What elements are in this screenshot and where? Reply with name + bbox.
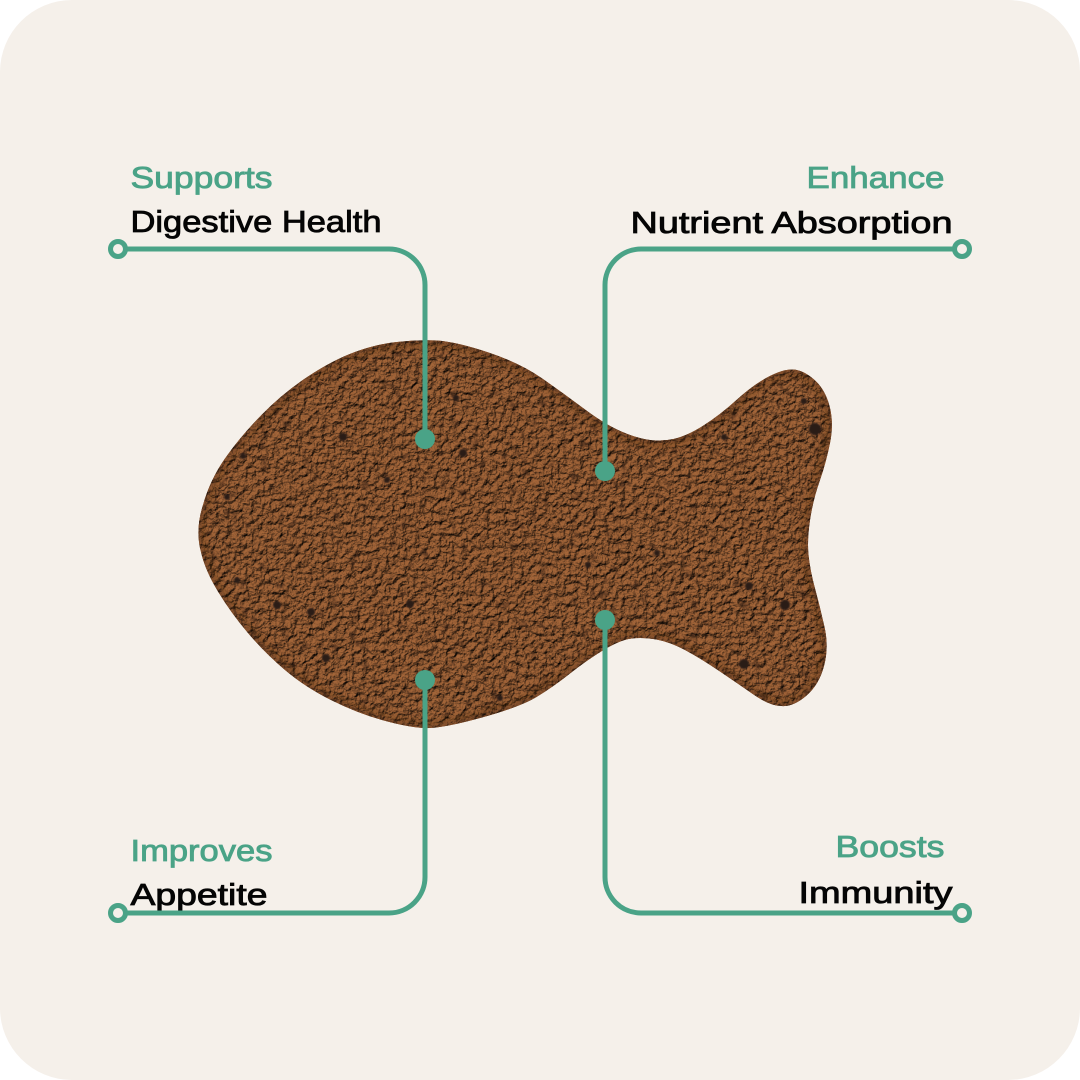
label: boosts: Boosts: [836, 829, 944, 864]
fish biscuit: [190, 330, 840, 740]
callout: enhance nutrient absorption: [595, 160, 970, 481]
connector: immunity: [605, 620, 962, 913]
callout: boosts immunity: [595, 610, 970, 920]
dot: nutrient absorption: [595, 461, 615, 481]
connector: nutrient absorption: [605, 249, 962, 471]
dot: immunity: [595, 610, 615, 630]
dot: appetite: [415, 670, 435, 690]
callout: supports digestive health: [110, 160, 435, 449]
label: nutrient absorption: Nutrient Absorption: [630, 205, 952, 240]
end ring: digestive health: [110, 242, 126, 256]
dot: digestive health: [415, 429, 435, 449]
end ring: nutrient absorption: [954, 242, 970, 256]
label: immunity: Immunity: [798, 875, 953, 910]
label: enhance: Enhance: [806, 160, 944, 195]
label: digestive health: Digestive Health: [130, 204, 382, 239]
end ring: appetite: [110, 906, 126, 920]
end ring: immunity: [954, 906, 970, 920]
connector: appetite: [118, 680, 425, 913]
label: appetite: Appetite: [130, 877, 268, 912]
callout: improves appetite: [110, 670, 435, 920]
connector: digestive health: [118, 249, 425, 439]
label: supports: Supports: [130, 160, 272, 195]
label: improves: Improves: [130, 833, 272, 868]
